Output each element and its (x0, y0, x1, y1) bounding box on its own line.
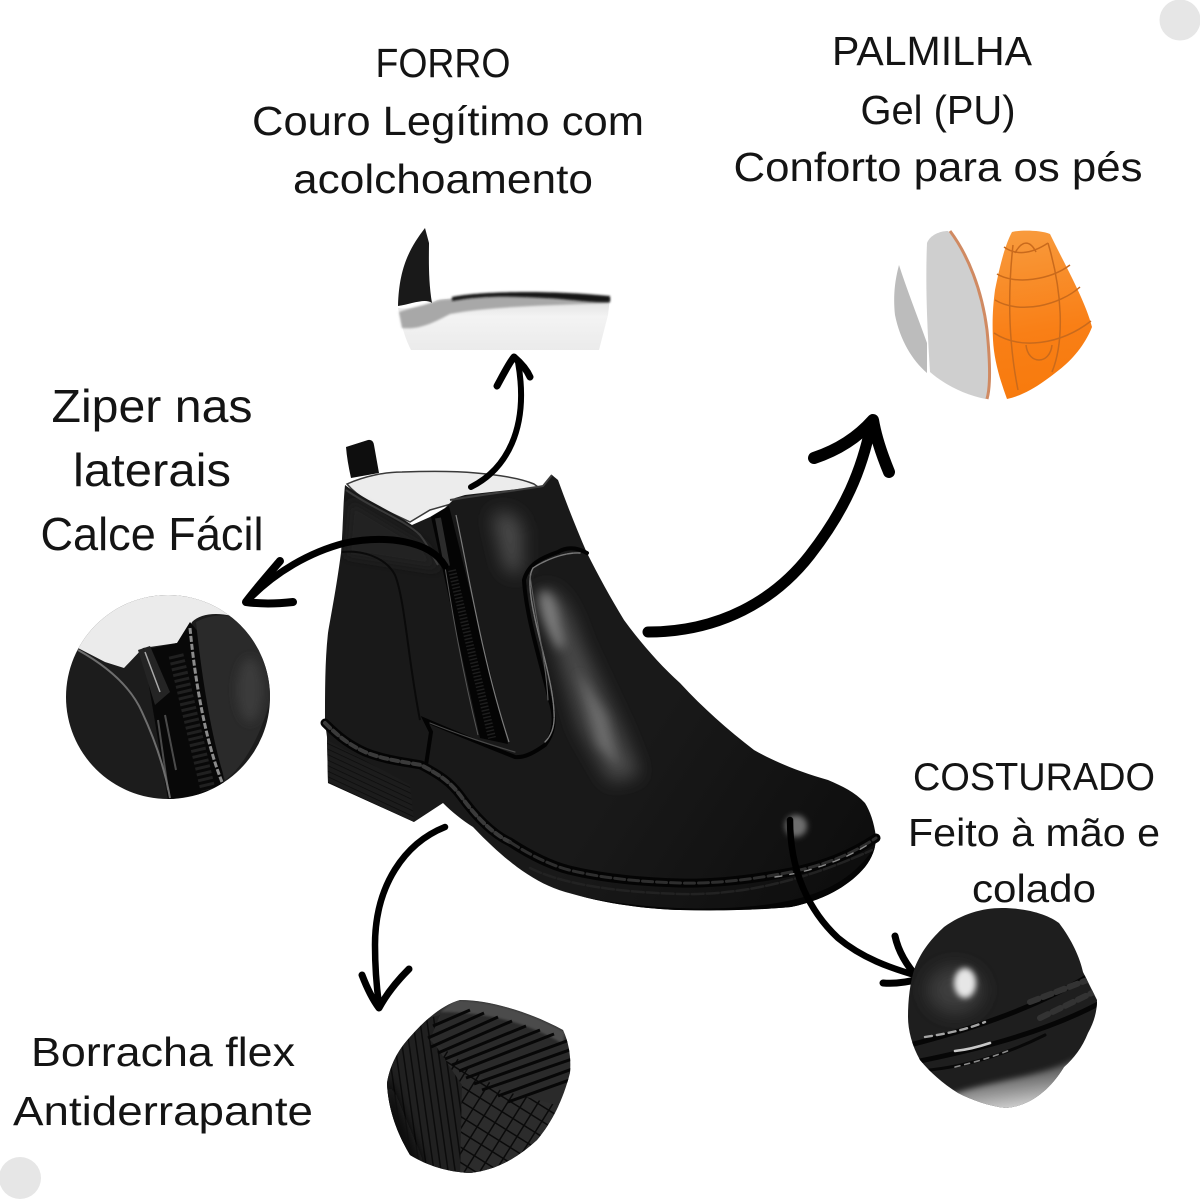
icon: forro lining detail (398, 228, 610, 350)
heading: borracha: Borracha flex (31, 1029, 296, 1075)
rubber ribs (428, 1010, 575, 1102)
boot sole stitching (325, 723, 876, 894)
arrow: ziper (246, 540, 445, 604)
heading: forro: FORRO (376, 40, 510, 86)
corner dot: bottom left (0, 1157, 41, 1199)
heading: ziper (40, 380, 264, 560)
insole grey layer (926, 231, 989, 399)
toe stitching (910, 972, 1100, 1070)
zipper circle pull (138, 646, 170, 705)
lining leather upright (398, 228, 432, 306)
boot upper (325, 475, 876, 910)
heading: ziper: Calce Fácil (40, 508, 264, 560)
arrow: palmilha (648, 420, 889, 632)
heading: palmilha: Gel (PU) (860, 87, 1016, 133)
corner dot: top right (1160, 0, 1200, 40)
toe lower shadow (954, 1057, 1073, 1108)
icon: palmilha insole detail (894, 231, 1092, 399)
heading: costurado: colado (972, 868, 1096, 911)
toe highlight (927, 966, 983, 1014)
boot shading and highlights (345, 500, 880, 915)
boot elastic panel stitching (425, 548, 587, 765)
icon: rubber sole detail (380, 1000, 575, 1180)
heading: forro (252, 40, 644, 202)
arrow: forro (471, 357, 530, 487)
arrow: borracha (362, 827, 445, 1008)
boot front panel edge (450, 475, 552, 500)
heading: borracha: Antiderrapante (13, 1088, 313, 1134)
heading: ziper: Ziper nas (52, 380, 253, 432)
boot lining (347, 471, 545, 522)
boot pull tab (346, 440, 379, 478)
insole orange gel (993, 231, 1092, 399)
heading: ziper: laterais (73, 444, 231, 496)
boot heel stack (327, 740, 414, 822)
heading: palmilha (734, 28, 1142, 190)
heading: borracha (13, 1029, 313, 1134)
heading: costurado: COSTURADO (913, 756, 1155, 799)
boot photo illustration (325, 440, 880, 915)
icon: stitched toe detail (908, 908, 1105, 1115)
heading: costurado (908, 756, 1160, 911)
insole gel lines (994, 243, 1091, 390)
rubber rim (440, 1000, 565, 1044)
lining black strip (452, 292, 610, 302)
boot zipper (431, 506, 509, 744)
heading: palmilha: PALMILHA (832, 28, 1033, 74)
heading: palmilha: Conforto para os pés (734, 144, 1142, 190)
heading: forro: acolchoamento (293, 156, 593, 202)
rubber diamond tread (437, 1047, 558, 1173)
insole left sliver (894, 265, 927, 373)
zipper circle teeth (143, 622, 225, 800)
icon: zipper detail circle (66, 595, 270, 799)
heading: costurado: Feito à mão e (908, 812, 1160, 855)
zipper circle fleece (78, 595, 229, 668)
rubber left fine ribs (387, 1015, 474, 1173)
lining fleece (398, 295, 610, 350)
zipper circle stitch (190, 628, 222, 782)
boot collar seam (346, 490, 438, 565)
heading: forro: Couro Legítimo com (252, 98, 644, 144)
arrow: costurado (790, 820, 919, 983)
